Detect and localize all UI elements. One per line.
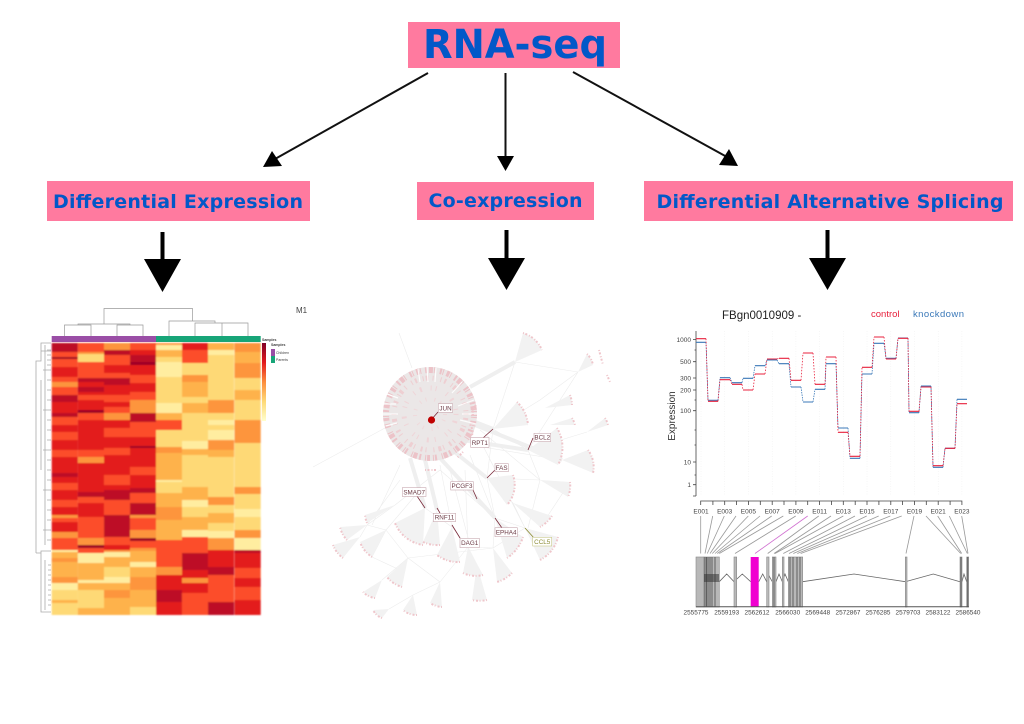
legend: control: control	[871, 309, 900, 320]
y axis: 1	[687, 482, 691, 489]
exon axis: E023	[954, 508, 970, 516]
exon axis: E009	[788, 508, 804, 516]
arrow: down to network	[488, 230, 525, 290]
gene labels: FAS	[496, 465, 508, 472]
gene labels: SMAD7	[403, 489, 426, 496]
vertical grid	[701, 331, 962, 496]
colour scale legend: Children	[276, 351, 289, 355]
heatmap cells	[52, 343, 261, 615]
colour scale legend: Samples	[262, 338, 276, 342]
heading: Differential Expression	[47, 181, 310, 221]
heading: Differential Alternative Splicing: Differential Alternative Splicing	[656, 191, 1004, 213]
arrow: down to heatmap	[144, 232, 181, 292]
network edges	[313, 333, 587, 609]
arrow: RNA-seq to co-expression	[497, 73, 514, 171]
splicing plot panel	[667, 309, 981, 616]
genomic coordinates: 2586540	[956, 610, 981, 616]
y axis: Expression	[667, 391, 678, 441]
legend: knockdown: knockdown	[913, 309, 964, 320]
y axis: 1000	[677, 337, 691, 344]
co-expression network	[313, 333, 610, 618]
y axis: 200	[680, 388, 691, 394]
gene labels: RNF11	[435, 515, 455, 522]
exon axis: E003	[717, 508, 733, 516]
title: RNA-seq: RNA-seq	[423, 22, 607, 68]
genomic coordinates: 2572867	[836, 610, 861, 616]
arrow: down to splicing plot	[809, 230, 846, 290]
gene labels: EPHA4	[496, 529, 517, 536]
exon axis: E011	[812, 508, 827, 516]
y axis: 500	[680, 359, 691, 366]
heading: Co-expression	[417, 182, 594, 220]
exon axis: E005	[741, 508, 756, 516]
genomic coordinates: 2566030	[775, 610, 801, 616]
arrow: RNA-seq to differential expression	[263, 73, 428, 167]
colour scale legend: Samples	[271, 343, 285, 347]
gene labels: DAG1	[461, 540, 479, 547]
exon axis: E017	[883, 508, 899, 516]
hub disc around JUN	[383, 367, 477, 461]
gene model	[696, 557, 969, 607]
hub node: JUN	[428, 416, 435, 424]
gene labels: BCL2	[534, 435, 551, 442]
genomic coordinates: 2569448	[805, 610, 831, 616]
column dendrogram	[64, 308, 248, 336]
label: M1: M1	[296, 306, 308, 315]
heading: Differential Expression: Differential Expression	[53, 191, 303, 213]
exon axis: E013	[836, 508, 851, 516]
gene labels: RPT1	[472, 440, 488, 447]
colour scale legend: Parents	[276, 358, 288, 362]
genomic coordinates: 2583122	[926, 610, 951, 616]
exon axis: E007	[765, 508, 780, 516]
genomic coordinates	[684, 610, 981, 616]
exon axis: E021	[931, 508, 946, 516]
heading: Differential Alternative Splicing	[644, 181, 1013, 221]
gene labels: JUN	[439, 405, 452, 412]
fan clusters	[333, 333, 608, 618]
sample annotation bar	[52, 336, 261, 342]
gene labels: PCGF3	[452, 483, 473, 490]
intron zigzag	[719, 574, 967, 582]
genomic coordinates: 2562612	[745, 610, 770, 616]
genomic coordinates: 2579703	[896, 610, 921, 616]
genomic coordinates: 2576285	[866, 610, 891, 616]
arrow: RNA-seq to alternative splicing	[573, 72, 738, 166]
heading: Co-expression: Co-expression	[428, 190, 582, 212]
y axis: 300	[680, 376, 691, 382]
exon axis: E015	[859, 508, 875, 516]
line: knockdown	[696, 338, 967, 467]
genomic coordinates: 2555775	[684, 610, 709, 616]
fan cluster tips	[333, 333, 610, 618]
plot title: FBgn0010909 -	[722, 310, 801, 322]
gene labels: CCL5	[534, 539, 551, 546]
colour scale legend	[262, 338, 289, 421]
thick edge bands	[410, 362, 562, 518]
exon connector lines	[701, 516, 968, 554]
exon blocks	[696, 557, 969, 607]
heatmap panel	[36, 306, 308, 615]
gene labels	[402, 404, 552, 548]
y axis: 100	[680, 408, 691, 415]
y axis	[667, 331, 696, 496]
exon axis: E019	[907, 508, 922, 516]
line: control	[696, 337, 967, 466]
exon axis: E001	[693, 508, 709, 516]
exon axis	[693, 501, 970, 516]
genomic coordinates: 2559193	[714, 610, 740, 616]
y axis: 10	[684, 460, 691, 466]
row dendrogram	[36, 343, 51, 612]
